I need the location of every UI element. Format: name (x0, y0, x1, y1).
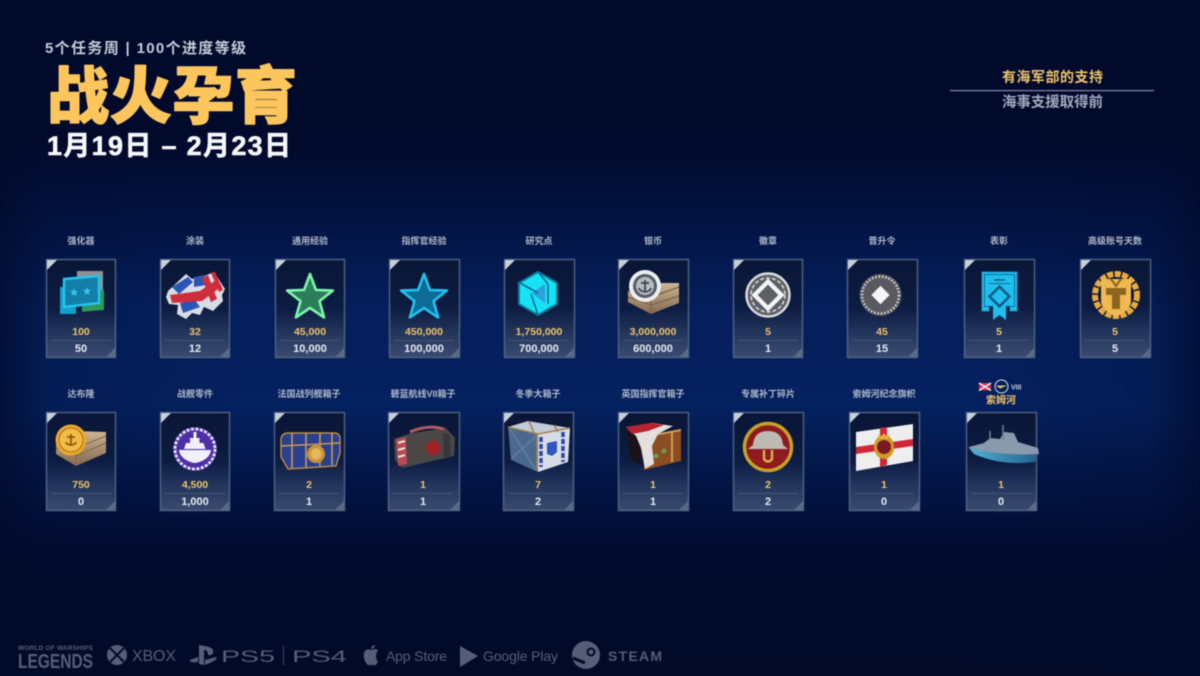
reward card: 银币: 银币 (644, 235, 662, 246)
reward card: 索姆河纪念旗帜: 索姆河纪念旗帜 (852, 388, 916, 399)
reward card: 高级账号天数: 高级账号天数 (1088, 235, 1142, 246)
reward card: 表彰: 表彰 (990, 235, 1008, 246)
logo: Steam: STEAM (608, 648, 662, 664)
reward card: 索姆河纪念旗帜: 0 (881, 496, 887, 508)
logo: Xbox: XBOX (132, 648, 176, 665)
reward card: 研究点: 1,750,000 (516, 326, 563, 338)
reward card: 徽章: 1 (765, 343, 771, 355)
reward card: 法国战列舰箱子: 法国战列舰箱子 (277, 388, 341, 399)
logo: World of Warships Legends: WORLD OF WARSHIPS (18, 645, 94, 652)
reward card: 晋升令: 晋升令 (868, 235, 896, 246)
reward card: 战舰零件: 战舰零件 (177, 388, 213, 399)
reward card: 冬季大箱子: 7 (535, 479, 541, 491)
logo: World of Warships Legends (18, 645, 94, 673)
admiralty support heading (950, 69, 1154, 111)
date range: 1月19日 – 2月23日 (47, 131, 291, 161)
reward card: 达布隆 (46, 388, 116, 510)
logo: World of Warships Legends: LEGENDS (18, 651, 93, 673)
reward card: 通用经验: 通用经验 (292, 235, 328, 246)
reward card: 达布隆: 达布隆 (67, 388, 95, 399)
reward card: 战舰零件: 1,000 (181, 496, 209, 508)
reward card: 英国指挥官箱子: 英国指挥官箱子 (621, 388, 685, 399)
platform logos (18, 641, 662, 673)
reward card: 专属补丁碎片: 专属补丁碎片 (741, 388, 795, 399)
subtitle: 5个任务周 | 100个进度等级 (45, 39, 246, 57)
reward card: 指挥官经验 (390, 235, 460, 358)
reward card: 专属补丁碎片 (734, 388, 804, 510)
reward card: 徽章 (734, 235, 802, 358)
reward card: 碧蓝航线VII箱子 (388, 388, 460, 510)
reward card: 指挥官经验: 指挥官经验 (401, 235, 447, 246)
ship nation and tier: VIII (1011, 384, 1022, 392)
reward card: 银币: 600,000 (633, 343, 673, 355)
reward card: 战舰零件: 4,500 (182, 479, 208, 491)
reward card: 冬季大箱子: 冬季大箱子 (515, 388, 561, 399)
logo: Xbox (107, 645, 176, 665)
reward card: 强化器: 100 (72, 326, 90, 338)
reward card: 专属补丁碎片: 2 (765, 479, 771, 491)
reward card: 晋升令: 15 (876, 343, 888, 355)
reward card: 通用经验: 45,000 (294, 326, 326, 338)
logo: App Store: App Store (386, 648, 447, 664)
reward card: 法国战列舰箱子: 2 (306, 479, 312, 491)
reward card: 专属补丁碎片: 2 (765, 496, 771, 508)
reward card: 法国战列舰箱子 (274, 388, 344, 510)
reward card: 晋升令: 45 (876, 326, 888, 338)
logo: Steam (572, 641, 662, 669)
reward card: 银币: 3,000,000 (630, 326, 677, 338)
reward card: 表彰: 1 (996, 343, 1002, 355)
reward card: 表彰 (964, 235, 1034, 358)
reward card: 涂装: 涂装 (186, 235, 204, 246)
logo: PlayStation (190, 645, 347, 666)
reward card: 涂装 (160, 235, 230, 358)
reward card: 达布隆: 0 (78, 496, 84, 508)
reward card: 达布隆: 750 (72, 479, 90, 491)
reward card: 涂装: 32 (189, 326, 201, 338)
reward card: 索姆河纪念旗帜 (850, 388, 920, 510)
header block (45, 39, 297, 161)
logo: Google Play: Google Play (483, 648, 558, 664)
reward card: 研究点: 700,000 (519, 343, 559, 355)
logo: PlayStation: PS5 (221, 647, 275, 666)
reward card: 指挥官经验: 450,000 (405, 326, 443, 338)
reward card: 碧蓝航线VII箱子: 碧蓝航线VII箱子 (390, 388, 456, 399)
reward card: 冬季大箱子: 2 (535, 496, 541, 508)
reward card: 法国战列舰箱子: 1 (306, 496, 312, 508)
reward card: 英国指挥官箱子 (618, 388, 688, 510)
reward card: 冬季大箱子 (504, 388, 574, 510)
logo: PlayStation: PS4 (292, 647, 347, 666)
reward card: 徽章: 5 (765, 326, 771, 338)
reward card: 通用经验: 10,000 (293, 343, 327, 355)
title: 战火孕育 (47, 63, 297, 132)
reward card: 高级账号天数: 5 (1112, 343, 1118, 355)
reward card: 高级账号天数 (1080, 235, 1150, 358)
reward card: 索姆河 ship (966, 380, 1039, 510)
reward card: 强化器: 50 (75, 343, 87, 355)
reward card: 战舰零件 (160, 388, 230, 510)
reward card: 研究点 (504, 235, 574, 358)
reward card: 索姆河 ship: 索姆河 (986, 394, 1016, 406)
reward card: 索姆河 ship: 1 (998, 479, 1004, 491)
admiralty support heading: 有海军部的支持 (1002, 69, 1103, 85)
reward card: 高级账号天数: 5 (1112, 326, 1118, 338)
reward card: 指挥官经验: 100,000 (404, 343, 444, 355)
reward card: 表彰: 5 (996, 326, 1002, 338)
reward card: 索姆河纪念旗帜: 1 (881, 479, 887, 491)
reward card: 索姆河 ship: 0 (998, 496, 1004, 508)
reward card: 徽章: 徽章 (759, 235, 777, 246)
admiralty support heading: 海事支援取得前 (1002, 93, 1103, 111)
reward card: 英国指挥官箱子: 1 (650, 496, 656, 508)
reward card: 强化器 (46, 235, 116, 358)
reward card: 碧蓝航线VII箱子: 1 (420, 496, 426, 508)
reward card: 研究点: 研究点 (525, 235, 553, 246)
reward card: 晋升令 (848, 235, 918, 358)
logo: App Store (364, 645, 447, 665)
reward card: 涂装: 12 (189, 343, 201, 355)
reward card: 通用经验 (276, 235, 344, 358)
reward card: 英国指挥官箱子: 1 (650, 479, 656, 491)
reward card: 银币 (618, 235, 688, 358)
reward card: 碧蓝航线VII箱子: 1 (420, 479, 426, 491)
logo: Google Play (460, 646, 558, 667)
reward card: 强化器: 强化器 (67, 235, 95, 246)
